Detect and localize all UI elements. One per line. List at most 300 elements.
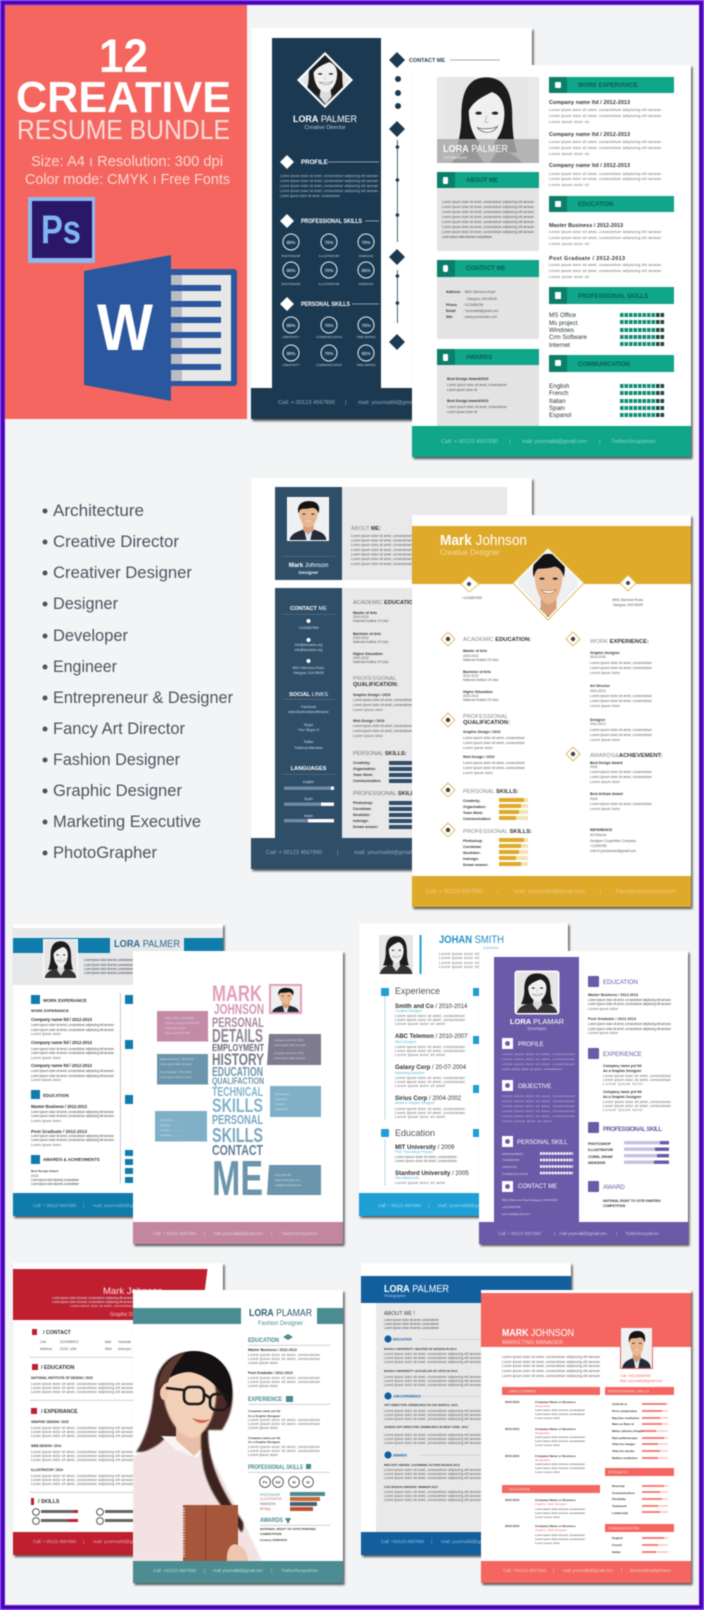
right column: COREL DRAW [588, 1155, 613, 1159]
right column: NATIONAL RIGHT TO VOTE PAINTING [603, 1199, 661, 1203]
panel: gold resume: 2010-2012 [463, 654, 479, 658]
timeline [381, 988, 479, 1185]
footer text: Call: + 00123 4567890 [278, 400, 335, 406]
panel: salmon marketing resume: designation [535, 1404, 551, 1408]
panel: slate resume: www.facebook/profilename [288, 710, 329, 714]
right column panels: Lorem ipsum dolor sit amet, consectetuer adipiscing elit aenean [549, 172, 661, 176]
panel: slate resume: info@domaine.org [295, 648, 322, 652]
footer text: | [204, 1568, 205, 1573]
panel: gold resume: Team Work: [463, 811, 483, 815]
left column panels: Lorem ipsum dolor sit [447, 388, 477, 392]
panel: johan smith resume: Lorem ipsum dolor sit [439, 956, 479, 960]
panel: fashion designer resume: PHOTOSHOP [260, 1493, 280, 1497]
timeline entries: 2010-2013 [505, 1498, 520, 1502]
panel: blue lora palmer resume: Lorem ipsum dolor [31, 1056, 62, 1060]
experience entries [395, 1004, 469, 1177]
footer text: mail: yourmailid@gmail.com [563, 1568, 613, 1573]
sidebar sections: PROFILE [518, 1042, 544, 1048]
left column panels: ABOUT ME [466, 178, 498, 184]
footer text: Twitter/lorapalmer [625, 1231, 659, 1236]
right column panels: Lorem ipsum dolor sit [549, 242, 589, 246]
right column: Lorem ipsum dolor [603, 1082, 644, 1086]
navy sidebar: 65% [362, 268, 370, 273]
section text: Master Business / 2012-2013 [31, 1104, 88, 1109]
panel: johan smith resume: Lorem ipsum dolor sit [439, 952, 479, 956]
panel: red resume: Lorem ipsum dolor sit amet, consectetuer adipiscing elit aenean [31, 1478, 133, 1482]
footer text: Twitter/lorapalmer [281, 1231, 318, 1236]
contact strip [389, 52, 500, 350]
skill labels: Teamwork [612, 1504, 627, 1508]
left column panels: Best Design Award/2010 [447, 377, 489, 381]
footer text [498, 1231, 659, 1236]
panel: slate resume: info@domaine.org [295, 643, 322, 647]
speech boxes: Creative ...... [275, 1102, 290, 1106]
panel: salmon marketing resume: Lorem ipsum dolor [535, 1470, 560, 1474]
panel: gold resume: Bachelor of Arts [463, 670, 491, 674]
right column panels: Lorem ipsum dolor sit [549, 183, 589, 187]
sidebar sections: yourmail@gmail.com [502, 1212, 531, 1216]
panel: gold resume: 8901 Marmora Road, [612, 598, 644, 602]
speech boxes: Lorem ipsum dolor sit amet [160, 1075, 192, 1079]
panel: gold resume: Mark Johnson [440, 532, 527, 549]
experience entries: ABC Telemon / 2010-2007 [395, 1034, 468, 1040]
timeline entries: Company Name or Business [535, 1498, 576, 1502]
panel: blue photographer resume: LORA PALMER [384, 1284, 449, 1295]
right column headings: PROFESSIONAL SKILLS [248, 1465, 303, 1471]
footer text: mail: yourmailid@gmail.com [441, 1539, 499, 1544]
panel: gold resume: National Institue Of Uiss [463, 678, 499, 682]
skill labels: MS Office [549, 312, 577, 319]
footer text: | [497, 889, 498, 895]
panel: slate resume: Lorem ipsum dolor sit amet, consectetuer [353, 729, 413, 733]
footer text: mail: yourmailid@gmail.com [93, 1203, 151, 1208]
sidebar sections: Lorem ipsum dolor sit amet, consectetuer [502, 1062, 575, 1066]
panel: johan smith resume: Lorem ipsum dolor sit amet, consectetuer [395, 1076, 466, 1080]
navy sidebar: ILLUSTRATOR [319, 254, 340, 258]
panel: gold resume: Lorem ipsum dolor sit amet, consectetuer [590, 733, 653, 737]
contact rows: www.you [118, 1347, 131, 1351]
left column panels: Lorem ipsum dolor sit amet, consectetuer [447, 383, 508, 387]
left column panels: Email [446, 309, 456, 313]
navy sidebar: PERSONAL SKILLS [301, 301, 350, 308]
navy sidebar: 70% [325, 268, 333, 273]
section text: Company name ltd / 2012-2013 [31, 1040, 93, 1045]
panel: fashion designer resume [133, 1290, 343, 1583]
panel: red resume: Lorem ipsum dolor sit amet, consectetuer [70, 1304, 134, 1308]
panel: blue lora palmer resume: Lorem ipsum dolor [31, 1119, 62, 1123]
panel: slate resume: Twitter [304, 740, 314, 744]
timeline entries: Company Name or Business [535, 1524, 576, 1528]
skill labels: French [612, 1543, 622, 1547]
panel: blue lora palmer resume: Lorem ipsum dolor sit amet, consectetuer adipiscing elit aenean [31, 1074, 114, 1078]
footer text: Call: + 00123 4567890 [498, 1231, 541, 1236]
navy sidebar: 80% [287, 240, 295, 245]
navy sidebar: 80% [287, 268, 295, 273]
panel: gold resume: Art Director [590, 684, 611, 688]
navy sidebar: COMMUNICATION [316, 335, 342, 339]
panel: gold resume: Lorem ipsum dolor sit amet, consectetuer [590, 775, 653, 779]
panel: salmon marketing resume: Lorem ipsum dolor sit amet, consectetuer [535, 1533, 585, 1537]
panel: salmon marketing resume: Lorem ipsum dolor sit amet, consectetuer [535, 1439, 585, 1443]
panel: blue photographer resume: EDUCATION [393, 1338, 412, 1342]
gold skill bars [499, 798, 528, 866]
panel: slate resume: Dream weaver: [353, 825, 379, 829]
footer text: | [554, 1231, 555, 1236]
list of job titles: Engineer [53, 657, 117, 676]
panel: slate resume: Mark Johnson [289, 562, 329, 569]
panel: gold resume: 2011-2013 [590, 722, 606, 726]
panel: blue photographer resume: Lorem ipsum dolor sit amet, consectetuer adipiscing elit aenean [384, 1383, 481, 1387]
panel: slate resume: Lorem ipsum dolor sit amet, consectetuer [353, 724, 413, 728]
section headings: QUALIFICATION: [463, 720, 510, 726]
footer text [381, 1539, 499, 1544]
panel: red resume: Lorem ipsum dolor sit amet, consectetuer adipiscing elit aenean [31, 1390, 133, 1394]
sidebar sections: Lorem ipsum dolor sit amet, consectetuer [502, 1094, 575, 1098]
panel: blue lora palmer resume: Lorem ipsum dolor sit amet, consectetuer adipiscing elit aenean [31, 1051, 114, 1055]
panel: red resume: NATIONAL INSTITUTE OF DESIGN / 2015 [31, 1376, 93, 1380]
right column: PROFESSIONAL SKILL [603, 1127, 662, 1133]
skill labels: Nullam restitution [612, 1456, 638, 1460]
language bars [284, 786, 334, 822]
panel: fashion designer resume: Fashion Designer [258, 1320, 304, 1327]
panel: johan smith resume: Lorem ipsum dolor sit amet, consectetuer [395, 1107, 466, 1111]
skill labels: Press temporibus [612, 1409, 638, 1413]
panel: gold resume: Coreldraw: [463, 845, 482, 849]
panel: red resume [13, 1263, 223, 1555]
panel: gold resume: Designer [590, 718, 606, 722]
panel: fashion designer resume: Lorem ipsum dolor sit amet, consectetuer [248, 1353, 321, 1357]
footer text [503, 1568, 671, 1573]
panel: slate resume: Lorem ipsum dolor sit amet, consectetuer [353, 698, 413, 702]
panel: blue photographer resume: AWARDS [393, 1454, 407, 1458]
section headings: / EDUCATION [41, 1365, 75, 1371]
panel: red resume: GRAPHIC DESIGN / 2015 [31, 1420, 69, 1424]
speech boxes: Teamwork ...... [275, 1097, 292, 1101]
panel: blue lora palmer resume: Lorem ipsum dolor sit amet, consectetuer adipiscing elit aenean [31, 1138, 114, 1142]
footer text: | [83, 1203, 84, 1208]
speech boxes: Lorem ipsum dolor sit amet [274, 1056, 306, 1060]
left column panels: Lorem ipsum dolor sit [447, 410, 477, 414]
speech boxes: Coreldraw .............. [160, 1133, 183, 1137]
portrait [287, 497, 329, 541]
right column: Master Business / 2012-2013 [588, 993, 638, 997]
typographic column: EMPLOYMENT [212, 1042, 264, 1054]
panel: slate resume: Lorem ipsum dolor sit amet, consectetuer [351, 552, 413, 556]
typographic column: TECHNICAL [212, 1084, 263, 1099]
right column: Lorem ipsum dolor sit amet, consectetuer adipiscing elit aenean [588, 1022, 671, 1026]
panel: salmon marketing resume: EDUCATION [509, 1488, 530, 1492]
sidebar sections: 8901 Marmora Road Glasgow, D04 89GR [502, 1198, 559, 1202]
panel: gold resume: +12345789 [590, 844, 607, 848]
skill labels: English [612, 1536, 623, 1540]
panel: gold resume: Lorem ipsum dolor sit amet, consectetuer [590, 728, 653, 732]
panel: salmon marketing resume: Graphic / Web Designer [535, 1502, 567, 1506]
left column panels: Site [446, 315, 453, 319]
left column panels: : Yourmailid@gmail.com [463, 309, 499, 313]
skill labels: Crm Software [549, 334, 587, 341]
footer text: | [599, 439, 600, 445]
typographic column: PERSONAL [212, 1112, 263, 1127]
panel: gold resume: +1234567890 [462, 596, 482, 600]
panel: gold resume: Illustrator: [463, 851, 481, 855]
navy sidebar: 70% [362, 240, 370, 245]
panel: gold resume [412, 515, 691, 907]
panel: slate resume: National Institue Of Uiss [353, 619, 389, 623]
sidebar sections: Lorem ipsum dolor sit amet, consectetuer [502, 1052, 575, 1056]
right column headings: AWARDS [260, 1518, 283, 1524]
panel: fashion designer resume: Lorem ipsum dolor sit amet, consectetuer [248, 1445, 321, 1449]
panel: gold resume: 2010-2012 [463, 694, 479, 698]
skill labels: French [549, 390, 569, 397]
footer text: Call: +00123 4567890 [153, 1568, 196, 1573]
footer text: | [345, 400, 346, 406]
panel: typographic pink resume [133, 951, 343, 1244]
contact rows: 0120456913 [60, 1340, 79, 1344]
panel: blue photographer resume: Lorem ipsum dolor sit amet, consectetuer adipiscing elit aenean [384, 1468, 481, 1472]
panel: fashion designer resume: COMPETITION [260, 1532, 282, 1536]
panel: navy resume [251, 28, 532, 419]
software icons: Ps [263, 1480, 267, 1484]
experience entries: Smith and Co / 2010-2014 [395, 1004, 468, 1010]
panel: gold resume: Photoshop: [463, 839, 483, 843]
left column panels: CONTACT ME [466, 266, 506, 272]
right column: As a Graphic Designer [603, 1095, 642, 1099]
footer text: Twitter/lorapalmer [281, 1568, 318, 1573]
section text: Best Design Award [31, 1169, 58, 1173]
typographic column: PERSONAL [212, 1014, 264, 1030]
footer text: mail: yourmailid@gmail.com [213, 1231, 263, 1236]
panel: johan smith resume: Lorem ipsum dolor sit amet [395, 1022, 445, 1026]
right column panels: Lorem ipsum dolor sit amet, consectetuer adipiscing elit aenean [549, 236, 661, 240]
skill labels: Nam pellentesque [612, 1436, 638, 1440]
sidebar sections: TEAMWORK [502, 1158, 520, 1162]
skill labels: English [549, 383, 570, 390]
sidebar sections: CREATIVE [502, 1165, 517, 1169]
sidebar sections: Lorem ipsum dolor sit amet, consectetuer [502, 1109, 575, 1113]
panel: johan smith resume: JOHAN SMITH [439, 934, 504, 946]
speech boxes: Date of Birth: 12/12/1990 [165, 1016, 194, 1020]
panel: salmon marketing resume: EMPLOYEMENT [509, 1390, 537, 1394]
right column: INDESIGN [588, 1161, 606, 1165]
footer text: | [616, 1231, 617, 1236]
panel: blue photographer resume: Lorem ipsum dolor sit amet, consectetuer adipiscing elit aenean [384, 1476, 481, 1480]
portrait diamond [297, 52, 353, 108]
left column panels: : www.yourdomain.com [463, 315, 497, 319]
panel: teal resume [412, 65, 691, 457]
right column panels [549, 77, 674, 419]
typographic column: ME [212, 1152, 263, 1206]
speech boxes: 0123 456 789 [275, 1173, 291, 1177]
title: 12 [99, 29, 148, 82]
panel: salmon marketing resume: Lorem ipsum dolor [535, 1443, 560, 1447]
panel: slate resume: Creativity: [353, 761, 371, 765]
footer text [278, 400, 428, 406]
panel: slate resume: National Institue Of Uiss [353, 660, 389, 664]
panel: gold resume: Lorem ipsum dolor [463, 746, 494, 750]
right column: EXPERIENCE [603, 1052, 642, 1058]
footer text [378, 1203, 496, 1208]
navy sidebar: 70% [325, 323, 333, 328]
panel: fashion designer resume: Lorem ipsum dolor sit amet, consectetuer [248, 1357, 321, 1361]
icon: photoshop [28, 197, 95, 263]
footer text: Twitter/lorapalmer [611, 439, 656, 445]
main text: ACADEMIC EDUCATION: [353, 600, 419, 606]
panel: blue photographer resume: RED DOT AWARD: CHARMING ACTION DESIGN 2012 [384, 1463, 460, 1467]
panel: slate resume: English [303, 780, 314, 784]
right column panels: WORK EXPERIANCE [578, 83, 638, 89]
speech boxes [155, 1011, 321, 1195]
contact diamonds [461, 575, 636, 592]
panel: blue lora palmer resume: Lorem ipsum dolor sit amet, consectetuer adipiscing elit aenean [31, 1069, 114, 1073]
right column: Lorem ipsum dolor [588, 1007, 619, 1011]
panel: gold resume: Lorem ipsum dolor sit amet, consectetuer [590, 694, 653, 698]
panel: gold resume: Lorem ipsum dolor [590, 704, 621, 708]
skill labels: Vitae leo iaculis [612, 1449, 635, 1453]
skill labels: Metus ultricies fringilla [612, 1429, 645, 1433]
navy sidebar: 65% [362, 351, 370, 356]
panel: blue lora palmer resume: Lorem ipsum dolor [31, 1032, 62, 1036]
panel: johan smith resume: Lorem ipsum dolor sit amet, consectetuer [395, 1018, 466, 1022]
right column panels: Lorem ipsum dolor sit amet, consectetuer adipiscing elit aenean [549, 230, 661, 234]
panel: blue lora palmer resume: Lorem ipsum dolor sit amet, consectetuer [84, 967, 134, 971]
right column panels: COMMUNICATION [578, 362, 630, 368]
panel: purple resume: LORA PLAMAR [510, 1017, 565, 1026]
navy sidebar: PROFILE [301, 159, 328, 166]
list of job titles: Marketing Executive [53, 812, 201, 831]
panel: blue photographer resume: Lorem ipsum dolor sit amet, consectetuer [384, 1326, 440, 1330]
panel: red resume: Graphic Design [110, 1312, 145, 1318]
footer text: Facebook/markjohnson [616, 889, 676, 895]
panel: johan smith resume: Lorem ipsum dolor sit amet, consectetuer [395, 1155, 458, 1159]
navy sidebar: CREATIVITY [282, 363, 300, 367]
section text: EDUCATION [43, 1093, 69, 1098]
software icons: Dd [276, 1480, 280, 1484]
panel: blue photographer resume: Lorem ipsum dolor sit amet, consectetuer adipiscing elit aenean [384, 1498, 481, 1502]
panel: slate resume: Lorem ipsum dolor sit amet, consectetuer [351, 543, 413, 547]
panel: slate resume: 8901 Marmora Road, [292, 666, 325, 670]
panel: blue photographer resume: JUNIOR ART DIRECTOR: EDINBURGH IN NEW YORK, 2012 [384, 1425, 468, 1429]
left column panels: Lorem ipsum dolor sit amet, consectetuer [442, 235, 493, 239]
footer text: mail: yourmailid@gmail.com [438, 1203, 496, 1208]
panel: slate resume: Lorem ipsum dolor sit amet, consectetuer [351, 538, 413, 542]
right column: Lorem ipsum dolor sit amet, consectetuer [603, 1100, 672, 1104]
panel: salmon marketing resume: Lorem ipsum dolor sit amet, consectetuer [535, 1408, 585, 1412]
section headings [463, 637, 662, 835]
right column: Company name pvt ltd [603, 1090, 642, 1094]
speech boxes: Phone: 0123 456 789 [165, 1031, 190, 1035]
skill labels: Leadership [612, 1511, 628, 1515]
panel: blue lora palmer resume: Lorem ipsum dolor [31, 1078, 62, 1082]
right column headings: EXPERIENCE [248, 1397, 282, 1403]
footer text [153, 1568, 318, 1573]
left column panels: Lorem ipsum dolor sit amet, consectetuer adipiscing elit aenean [442, 220, 534, 224]
panel: salmon marketing resume: Call: +00123456789 [620, 1374, 651, 1378]
navy sidebar: 80% [287, 351, 295, 356]
panel: slate resume: Lorem ipsum dolor sit amet, consectetuer [351, 557, 413, 561]
panel: gold resume: Organisation: [463, 805, 486, 809]
footer text: mail: yourmailid@gmail.com [514, 889, 585, 895]
panel: slate resume: Indesign: [353, 819, 369, 823]
panel: salmon marketing resume: Lorem ipsum dolor [535, 1416, 560, 1420]
panel: slate resume: Master of Arts [353, 611, 377, 615]
panel: johan smith resume: Creative Designer [395, 1009, 423, 1013]
panel: fashion designer resume: Company name pvt ltd [248, 1436, 280, 1440]
panel: blue lora palmer resume: Lorem ipsum dolor sit amet, consectetuer [84, 971, 134, 975]
timeline entries: Company Name or Business [535, 1454, 576, 1458]
experience entries: Sirius Corp / 2004-2002 [395, 1096, 462, 1102]
sidebar text: CONTACT ME [290, 606, 327, 612]
panel: blue lora palmer resume: Lorem ipsum dolor sit amet, consectetuer adipiscing elit aenean [31, 1114, 114, 1118]
right column panels: EDUCATION [578, 202, 613, 208]
photo block: LORA PALMER [443, 144, 508, 155]
panel: fashion designer resume: Lorem ipsum dolor sit amet, consectetuer [248, 1380, 321, 1384]
navy sidebar: INDESIGN [359, 282, 373, 286]
footer text: Call: + 00123 4567890 [266, 850, 322, 856]
panel: johan smith resume: Lorem ipsum dolor sit amet, consectetuer [395, 1049, 466, 1053]
panel: salmon marketing resume: Lorem ipsum dolor sit amet, consectetuer adipiscing elit aenean [502, 1355, 600, 1359]
panel: slate resume: Lorem ipsum dolor sit amet, consectetuer [351, 562, 413, 566]
sidebar sections: CONTACT ME [518, 1184, 557, 1190]
sidebar text [289, 606, 328, 772]
contact rows: Mail [105, 1340, 111, 1344]
dividers [30, 1357, 133, 1493]
panel: fashion designer resume: Lorem ipsum dolor [248, 1361, 279, 1365]
left column panels: Lorem ipsum dolor sit amet, consectetuer adipiscing elit aenean [442, 210, 534, 214]
panel: gold resume: Lorem ipsum dolor [590, 807, 621, 811]
left column panels: Lorem ipsum dolor sit amet, consectetuer adipiscing elit aenean [442, 205, 534, 209]
left column panels: : 0123456789 [463, 303, 483, 307]
left column panels: Glasgow, D04 89GR [467, 297, 498, 301]
panel: red resume: WEB DESIGN / 2014 [31, 1444, 62, 1448]
speech boxes: www.yourdomain.com [275, 1178, 300, 1182]
panel: blue photographer resume: Lorem ipsum dolor sit amet, consectetuer adipiscing elit aenean [384, 1490, 481, 1494]
right column: Lorem ipsum dolor sit amet, consectetuer [603, 1078, 672, 1082]
panel: red resume: Lorem ipsum dolor sit amet, consectetuer adipiscing elit aenean [31, 1458, 133, 1462]
left column panels: : 8901 Marmora Road [463, 290, 495, 294]
footer text: | [271, 1568, 272, 1573]
right column panels: Lorem ipsum dolor sit amet, consectetuer adipiscing elit aenean [549, 177, 661, 181]
panel: gold resume: Designer Cooperitive Company [590, 839, 636, 843]
panel: johan smith resume: Lorem ipsum dolor sit [439, 965, 479, 969]
panel: blue lora palmer resume: Lorem ipsum dolor sit amet, consectetuer [84, 958, 134, 962]
right column panels: Post Graduate / 2012-2013 [549, 256, 625, 262]
panel: red resume: Lorem ipsum dolor sit amet, consectetuer adipiscing elit aenean [31, 1474, 133, 1478]
panel: fashion designer resume: As a Graphic Designer [248, 1414, 281, 1418]
portrait [514, 970, 560, 1014]
section text: AWARDS & ACHIEVMENTS [43, 1157, 100, 1162]
panel: red resume: Lorem ipsum dolor sit amet, consectetuer adipiscing elit aenean [31, 1430, 133, 1434]
timeline entries: 2010-2013 [505, 1427, 520, 1431]
panel: slate resume: Web Design / 2010 [353, 719, 384, 723]
speech boxes: Company name ltd / 2012 [274, 1038, 304, 1042]
panel: slate resume: Glasgow, D04 89GR [293, 671, 324, 675]
main text [351, 526, 420, 797]
panel: gold resume: Best Design Award [590, 761, 623, 765]
navy sidebar: TIME KEPING [356, 335, 376, 339]
timeline entries: Company Name or Business [535, 1400, 576, 1404]
list of job titles: Developer [53, 626, 128, 645]
list of job titles: Architecture [53, 501, 144, 520]
panel: johan smith resume [359, 923, 568, 1216]
panel: gold resume: REFERENCE [590, 828, 613, 832]
panel: red resume: Lorem ipsum dolor sit amet, consectetuer adipiscing elit aenean [31, 1426, 133, 1430]
panel: slate resume: Bachelor of Arts [353, 632, 381, 636]
timeline entries: 2010-2013 [505, 1454, 520, 1458]
panel: gold resume: Web Design / 2010 [463, 755, 494, 759]
subtitle: RESUME BUNDLE [17, 114, 230, 145]
panel: salmon marketing resume: Lorem ipsum dolor sit amet, consectetuer adipiscing elit aenean [502, 1374, 600, 1378]
photo block [436, 76, 540, 164]
